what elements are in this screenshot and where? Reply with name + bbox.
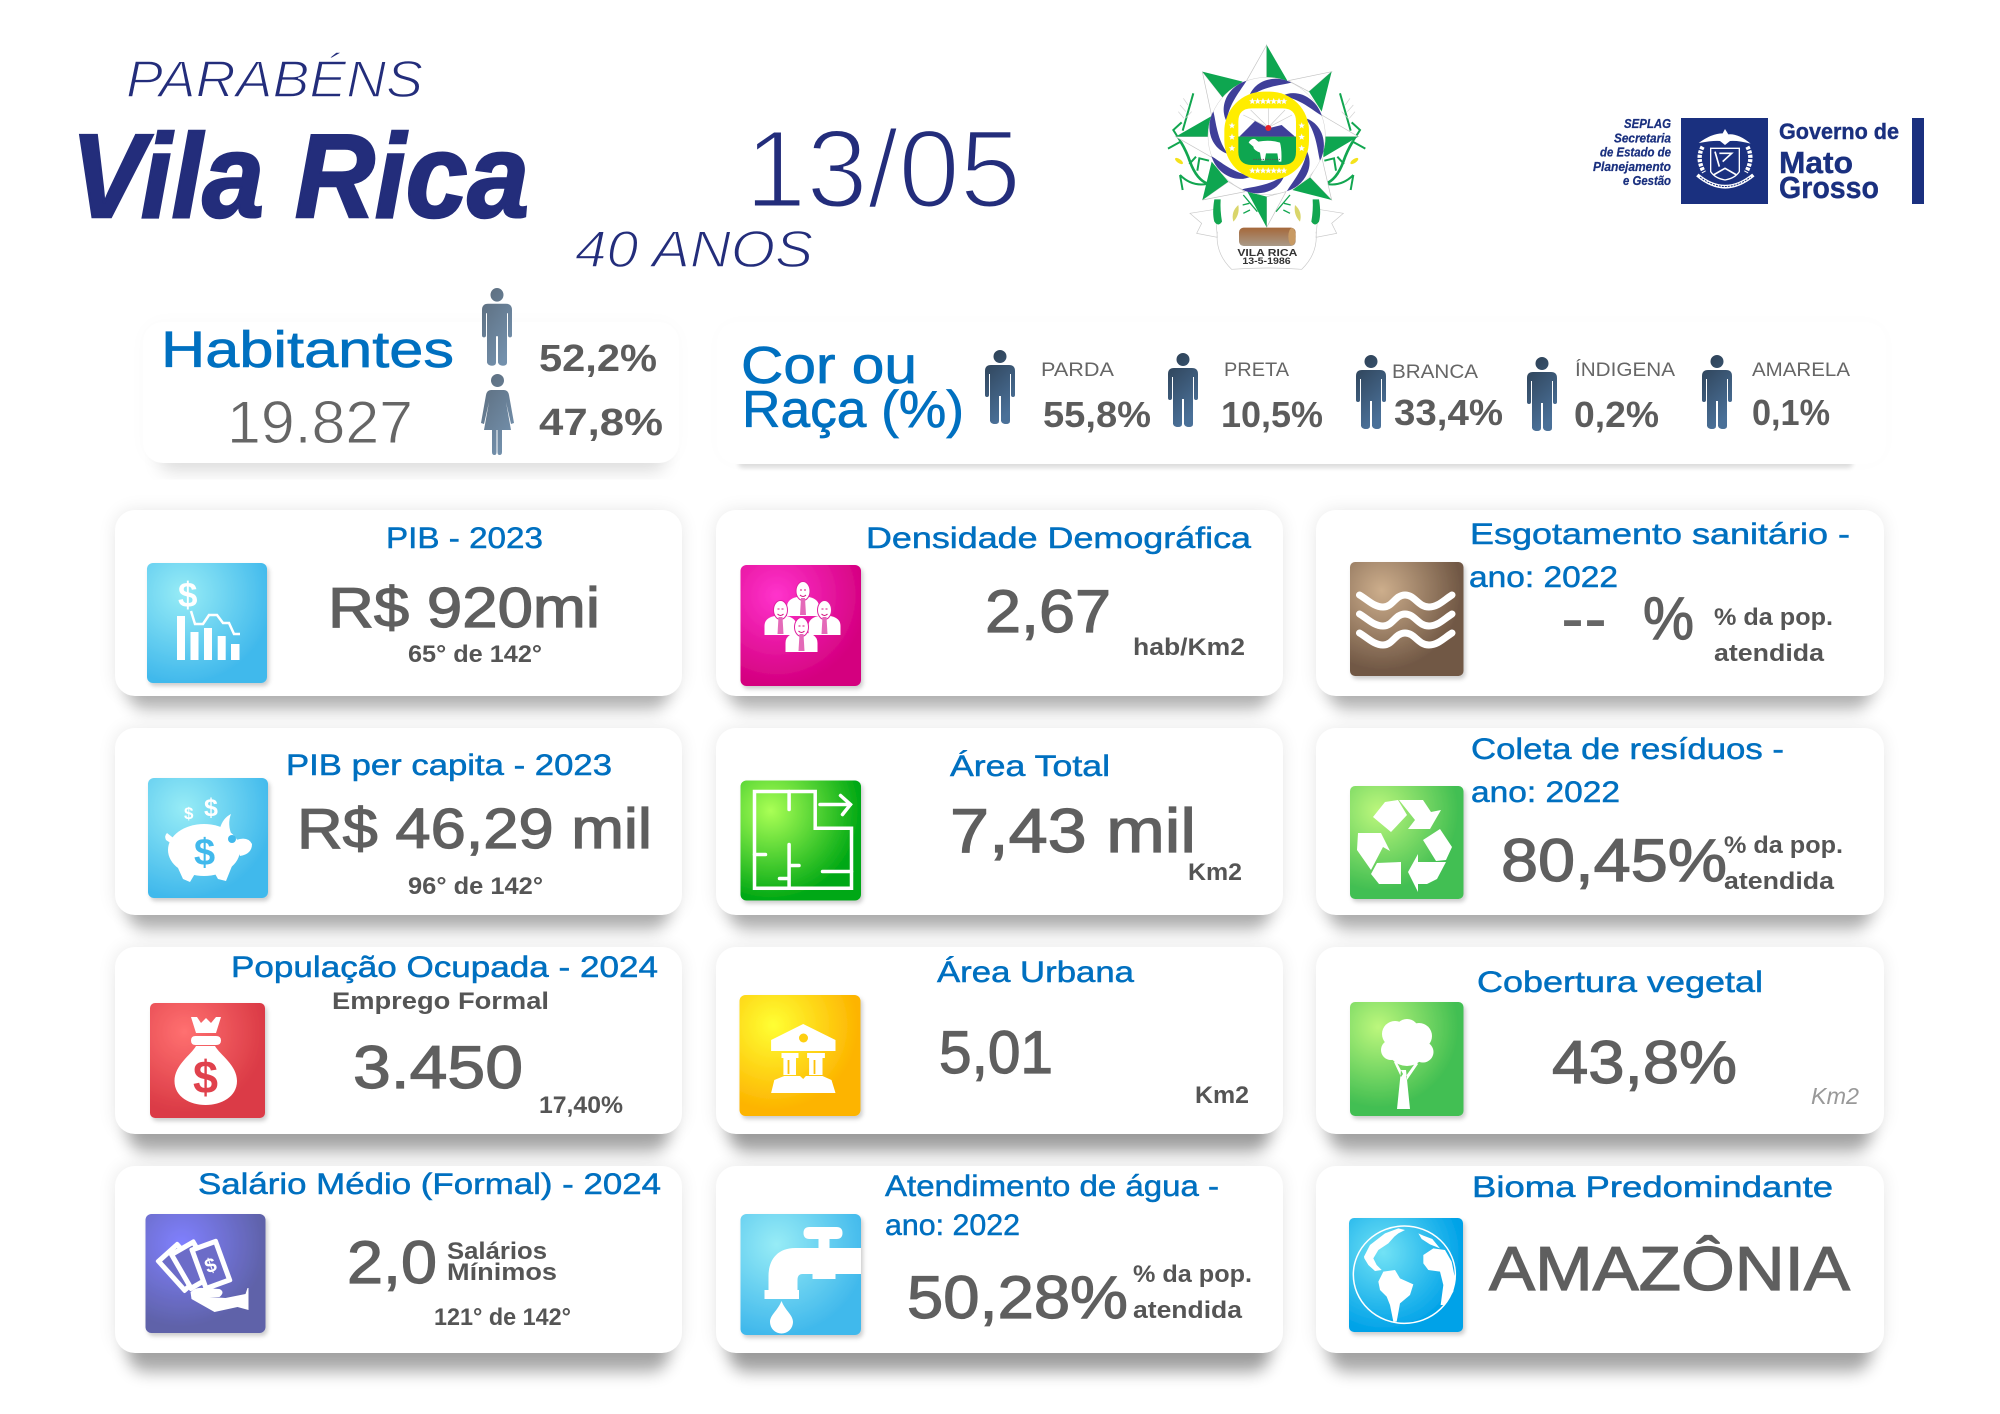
icon: money bag [150,1003,265,1118]
logo SEPLAG text: Planejamento [1593,159,1671,174]
card rank: 121° de 142° [434,1304,571,1331]
card: esgotamento sanitário [1316,510,1884,710]
panel shadow [717,322,1886,468]
card frame [1316,947,1884,1152]
logo SEPLAG text: e Gestão [1623,173,1671,188]
card rank: 65° de 142° [408,641,542,668]
card title: Área Total [950,750,1110,783]
card title: Esgotamento sanitário - [1470,518,1850,551]
icon: globe [1349,1218,1463,1332]
card frame [115,728,682,930]
icon: piggy bank [148,778,268,898]
card title: Cobertura vegetal [1477,966,1763,999]
emblem banner text [1237,248,1297,266]
card unit: hab/Km2 [1133,634,1245,661]
item: preta: PRETA [1224,359,1289,381]
value: population: 19.827 [227,389,413,456]
logo Mato: Mato [1779,145,1853,180]
card unit: % da pop. [1724,832,1843,859]
card unit: atendida [1714,640,1825,667]
title: Parabéns: PARABÉNS [126,51,423,109]
emblem ribbon [1190,209,1343,269]
icon: cash in hand: $ [202,1254,220,1278]
item: indígena: 0,2% [1574,394,1659,435]
card title [1471,733,1784,809]
card unit [1133,1261,1252,1324]
card frame [716,728,1283,930]
card value: 7,43 mil [950,797,1196,866]
panel shadow [143,322,679,472]
card unit [447,1238,557,1286]
card title: ano: 2022 [1469,561,1618,594]
card unit: atendida [1133,1297,1243,1324]
card: PIB per capita [115,728,682,930]
card: cobertura vegetal [1316,947,1884,1152]
card title: Salário Médio (Formal) - 2024 [198,1168,661,1201]
emblem log [1239,228,1296,246]
icon: piggy bank: $ [194,832,215,874]
card unit: Salários [447,1238,547,1265]
heading: Habitantes: Habitantes [161,321,454,378]
item: preta [1168,353,1323,435]
subtitle: 40 anos: 40 ANOS [575,221,813,279]
card unit: Km2 [1195,1082,1249,1109]
item: amarela: AMARELA [1752,359,1850,381]
icon: floor plan [740,780,861,900]
card unit: Km2 [1811,1083,1859,1109]
card value: 3.450 [353,1034,523,1101]
emblem: Vila Rica coat of arms [1168,45,1365,269]
card frame [1316,728,1884,930]
card: atendimento de água [716,1166,1283,1372]
card value: 5,01 [939,1019,1053,1086]
card unit: Km2 [1188,859,1242,886]
logo blue square [1681,118,1768,204]
card: coleta de resíduos [1316,728,1884,930]
card frame [1316,510,1884,710]
card title: PIB - 2023 [386,522,543,555]
icon: man [482,288,512,366]
emblem stars [1229,98,1305,173]
heading: Cor ou Raça [741,337,964,439]
card frame [716,1166,1283,1372]
item: preta: 10,5% [1221,394,1323,435]
logo: SEPLAG / Governo de Mato Grosso [1593,116,1924,205]
card value: R$ 46,29 mil [297,797,652,861]
card unit: Mínimos [447,1259,557,1286]
title: Vila Rica: Vila Rica [71,110,529,243]
card frame [716,510,1283,710]
card value: 2,0 [347,1229,437,1296]
panel background [143,322,679,463]
icon: recycle [1350,786,1464,899]
card: PIB 2023 [115,510,682,710]
card value: % [1643,585,1694,652]
card title: Coleta de resíduos - [1471,733,1784,766]
heading: Cor ou Raça: Cor ou [741,337,917,395]
card value: -- [1561,576,1607,659]
card: área total [716,728,1283,930]
card title: Densidade Demográfica [866,522,1251,555]
icon: piggy bank: $ [184,804,194,823]
card rank: 96° de 142° [408,873,543,900]
panel: habitantes [143,288,679,472]
card title: Atendimento de água - [885,1170,1219,1203]
card value: 43,8% [1552,1029,1737,1096]
logo SEPLAG text [1593,116,1671,188]
item: amarela [1702,355,1850,433]
card title: Bioma Predomindante [1472,1171,1833,1204]
card: bioma predominante [1316,1166,1884,1372]
value: women percent: 47,8% [539,402,663,444]
item: parda: PARDA [1041,359,1114,381]
emblem shield interior [1238,108,1296,165]
icon: money bag: $ [193,1051,218,1103]
heading: Cor ou Raça: Raça (%) [742,381,964,439]
card subtitle: Emprego Formal [332,988,549,1015]
icon: water tap [740,1214,861,1335]
card title [1469,518,1850,594]
logo Governo de: Governo de [1779,119,1899,144]
card value: 80,45% [1501,827,1727,894]
icon: declining chart: $ [178,576,197,615]
card title: ano: 2022 [885,1209,1020,1242]
icon: waves [1350,562,1464,676]
item: branca: 33,4% [1394,392,1503,433]
item: indígena: ÍNDIGENA [1575,358,1675,381]
date: 13/05: 13/05 [745,108,1021,231]
panel background [717,322,1886,464]
logo SEPLAG text: Secretaria [1614,130,1671,146]
card: salário médio [115,1166,682,1372]
emblem banner text: 13-5-1986 [1242,256,1291,266]
icon: declining chart [147,563,267,683]
card unit: atendida [1724,868,1835,895]
logo SEPLAG text: SEPLAG [1624,116,1671,131]
item: branca: BRANCA [1392,361,1478,383]
value: men percent: 52,2% [539,338,657,380]
card value: 50,28% [907,1264,1128,1331]
emblem star points [1176,45,1358,227]
card frame [115,947,682,1152]
logo state arms [1697,129,1753,187]
card: densidade demográfica [716,510,1283,710]
card title: ano: 2022 [1471,776,1620,809]
card unit: % da pop. [1714,604,1833,631]
icon: cash in hand [146,1214,266,1333]
card value [1561,576,1694,659]
emblem yellow frame [1224,92,1309,180]
icon: piggy bank: $ [204,794,218,822]
card title: População Ocupada - 2024 [231,951,658,984]
card note: 17,40% [539,1092,623,1119]
card unit: % da pop. [1133,1261,1252,1288]
emblem banner text: VILA RICA [1237,248,1297,259]
card title: PIB per capita - 2023 [286,749,612,782]
item: parda [985,350,1151,435]
emblem plants [1168,93,1365,224]
item: amarela: 0,1% [1752,392,1830,433]
logo SEPLAG text: de Estado de [1600,144,1671,160]
card frame [115,1166,682,1372]
item: branca [1356,355,1503,433]
card value: AMAZÔNIA [1489,1235,1851,1304]
card title [885,1170,1219,1242]
card unit [1724,832,1843,895]
icon: tree [1350,1002,1464,1116]
card title: Área Urbana [937,956,1134,989]
card: área urbana [716,947,1283,1152]
card value: R$ 920mi [328,576,600,640]
icon: people [740,565,861,686]
icon: public building [740,995,860,1116]
card value: 2,67 [985,578,1111,645]
logo Grosso: Grosso [1779,170,1879,205]
card frame [115,510,682,710]
card unit [1714,604,1833,667]
card: população ocupada [115,947,682,1152]
panel: cor ou raça [717,322,1886,468]
item: parda: 55,8% [1043,394,1151,435]
logo bar [1912,118,1924,204]
icon: woman [481,374,514,455]
card frame [1316,1166,1884,1372]
emblem twisted ring [1208,77,1325,195]
card frame [716,947,1283,1152]
item: indígena [1527,357,1675,435]
